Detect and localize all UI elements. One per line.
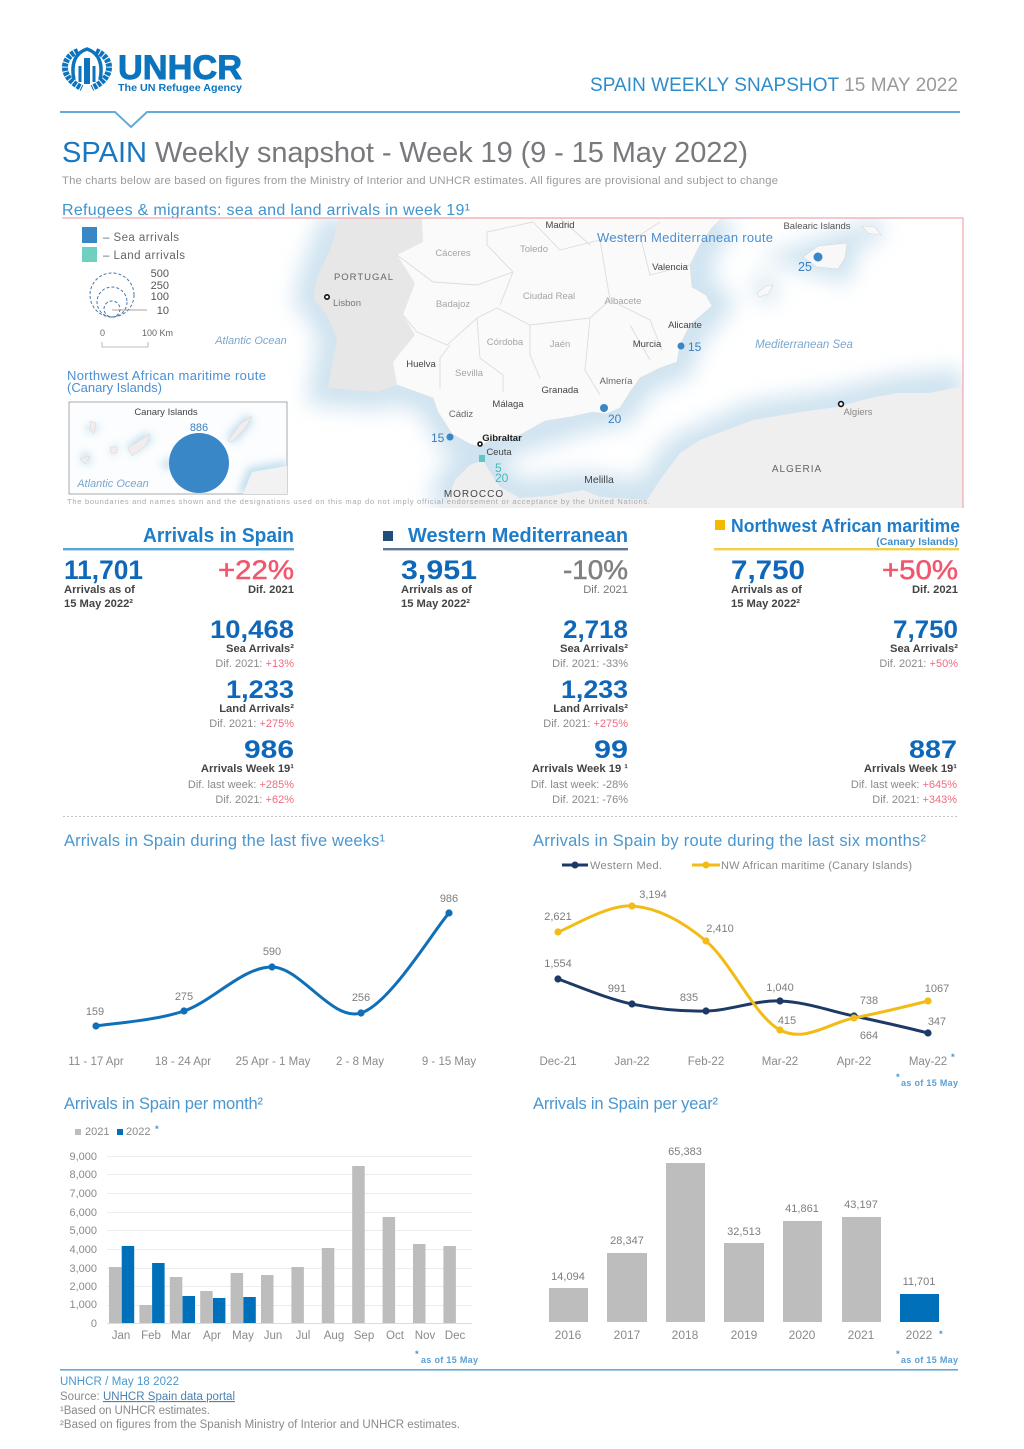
line chart: by route last six months: 1,554 bbox=[544, 958, 572, 970]
bar chart: arrivals per month: Feb bbox=[141, 1330, 161, 1342]
bar chart: arrivals per month: 0 bbox=[91, 1318, 97, 1330]
place names: Jaén bbox=[550, 339, 570, 350]
place names: Madrid bbox=[545, 220, 575, 231]
line chart: by route last six months: Apr-22 bbox=[837, 1056, 871, 1068]
line chart: last five weeks: 256 bbox=[352, 992, 370, 1004]
inset map: Canary Islands: Canary Islands bbox=[134, 407, 198, 418]
land: Portugal bbox=[313, 218, 423, 392]
bar chart: arrivals per month: 9,000 bbox=[69, 1151, 97, 1163]
panel: Western Mediterranean: Western Mediterranean bbox=[408, 525, 628, 547]
line chart: by route last six months: * bbox=[951, 1052, 955, 1063]
bar chart: arrivals per year: 65,383 bbox=[668, 1146, 702, 1158]
place names: Granada bbox=[542, 385, 579, 396]
map legend: 100 bbox=[151, 291, 169, 303]
legend bbox=[562, 860, 912, 872]
line chart: by route last six months: May-22 bbox=[909, 1056, 947, 1068]
arrival markers: 15 bbox=[688, 340, 702, 354]
bar chart: arrivals per month: Mar bbox=[171, 1330, 191, 1342]
bar chart: arrivals per month: May bbox=[232, 1330, 254, 1342]
line chart: by route last six months: 1,040 bbox=[766, 982, 794, 994]
arrival markers: 20 bbox=[608, 412, 622, 426]
wordmark: UNHCR bbox=[118, 49, 242, 87]
line chart: by route last six months: 3,194 bbox=[639, 889, 667, 901]
line chart: last five weeks: 25 Apr - 1 May bbox=[236, 1056, 311, 1068]
panel: Western Mediterranean: Dif. 2021: +275% bbox=[543, 718, 628, 730]
panel: Western Mediterranean bbox=[383, 525, 628, 806]
route label: Northwest African bbox=[67, 368, 266, 395]
arrival markers: 25 bbox=[798, 260, 812, 274]
bar chart: arrivals per year: 14,094 bbox=[551, 1271, 585, 1283]
bar chart: arrivals per year bbox=[533, 1095, 958, 1365]
legend: * bbox=[155, 1124, 159, 1135]
bar chart: arrivals per year: 41,861 bbox=[785, 1203, 819, 1215]
footer: Source: UNHCR Spain data portal bbox=[60, 1391, 235, 1403]
line chart: last five weeks: 986 bbox=[440, 893, 458, 905]
place names: PORTUGAL bbox=[334, 272, 394, 283]
bar chart: arrivals per month: 8,000 bbox=[69, 1169, 97, 1181]
panel: Western Mediterranean: 99 bbox=[594, 736, 628, 764]
map legend: 0 bbox=[100, 328, 105, 338]
line chart: by route last six months bbox=[533, 832, 958, 1088]
panel: Northwest African maritime: Northwest African maritime bbox=[731, 515, 960, 536]
footer: ¹Based on UNHCR estimates. bbox=[60, 1405, 210, 1417]
place names: Alicante bbox=[668, 320, 702, 331]
place names: Ciudad Real bbox=[523, 291, 575, 302]
bar chart: arrivals per year: 2022 bbox=[906, 1328, 933, 1342]
legend: 2021 bbox=[85, 1126, 109, 1138]
map legend: 100 Km bbox=[142, 328, 173, 338]
panel: Northwest African maritime: Dif. 2021: +343% bbox=[872, 794, 957, 806]
ocean and sea labels: Mediterranean Sea bbox=[755, 339, 853, 351]
panel: Arrivals in Spain: Arrivals in Spain bbox=[143, 525, 294, 547]
line chart: last five weeks: Arrivals in Spain during the last five weeks¹ bbox=[64, 832, 386, 850]
bar chart: arrivals per year: as of 15 May bbox=[901, 1355, 958, 1365]
bar chart: arrivals per month: Oct bbox=[386, 1330, 405, 1342]
line chart: by route last six months: Jan-22 bbox=[614, 1056, 650, 1068]
panel: Northwest African maritime bbox=[714, 515, 960, 806]
bar chart: arrivals per year: 2016 bbox=[555, 1328, 582, 1342]
line chart: by route last six months: * bbox=[896, 1072, 900, 1083]
legend bbox=[75, 1124, 159, 1138]
panel: Northwest African maritime: Dif. 2021: +50% bbox=[879, 658, 958, 670]
line chart: last five weeks: 159 bbox=[86, 1006, 104, 1018]
map legend bbox=[82, 227, 185, 347]
map legend: 250 bbox=[151, 280, 169, 292]
place names: Ceuta bbox=[486, 447, 512, 458]
panel: Western Mediterranean: Arrivals Week 19 ¹ bbox=[532, 763, 628, 775]
panel: Arrivals in Spain: Dif. 2021 bbox=[248, 584, 294, 596]
line chart: by route last six months: Dec-21 bbox=[539, 1056, 577, 1068]
panel: Western Mediterranean: Dif. 2021 bbox=[583, 584, 628, 596]
line chart: last five weeks: 275 bbox=[175, 991, 193, 1003]
title: SPAIN bbox=[62, 137, 147, 169]
bar chart: arrivals per month: 2,000 bbox=[69, 1281, 97, 1293]
place names: Sevilla bbox=[455, 368, 484, 379]
panel: Arrivals in Spain: 15 May 2022² bbox=[64, 598, 133, 610]
bar chart: arrivals per month: Dec bbox=[445, 1330, 465, 1342]
panel: Arrivals in Spain: Land Arrivals² bbox=[219, 703, 294, 715]
panel: Northwest African maritime: Arrivals as of bbox=[731, 584, 802, 596]
line chart: by route last six months: Arrivals in Spain by route during the last six months² bbox=[533, 832, 926, 850]
panel: Arrivals in Spain: 10,468 bbox=[210, 616, 294, 644]
footer: ²Based on figures from the Spanish Ministry of Interior and UNHCR estimates. bbox=[60, 1419, 460, 1431]
place names: Almería bbox=[600, 376, 633, 387]
route label: Northwest African: (Canary Islands) bbox=[67, 380, 162, 395]
route label: Western Mediterranean: Western Mediterranean route bbox=[597, 230, 773, 245]
line chart: last five weeks: 9 - 15 May bbox=[422, 1056, 476, 1068]
panel: Arrivals in Spain: Dif. 2021: +62% bbox=[215, 794, 294, 806]
ocean and sea labels bbox=[214, 335, 853, 351]
panel: Northwest African maritime: Dif. last week: +645% bbox=[851, 779, 957, 791]
line chart: by route last six months: as of 15 May bbox=[901, 1078, 958, 1088]
bar chart: arrivals per year: 2021 bbox=[848, 1328, 875, 1342]
map legend: 500 bbox=[151, 268, 169, 280]
bar chart: arrivals per month: 3,000 bbox=[69, 1263, 97, 1275]
legend: 2022 bbox=[126, 1126, 150, 1138]
panel: Northwest African maritime: 887 bbox=[909, 736, 957, 764]
bar chart: arrivals per month: Jan bbox=[112, 1330, 130, 1342]
panel: Western Mediterranean: 15 May 2022² bbox=[401, 598, 470, 610]
province borders bbox=[397, 218, 690, 395]
panel: Arrivals in Spain: Dif. last week: +285% bbox=[188, 779, 294, 791]
panel: Arrivals in Spain: 11,701 bbox=[64, 555, 143, 585]
bar chart: arrivals per month: Sep bbox=[354, 1330, 374, 1342]
panel: Northwest African maritime: 7,750 bbox=[893, 616, 958, 644]
panel: map bbox=[62, 218, 963, 508]
bar chart: arrivals per month bbox=[64, 1095, 478, 1365]
bar chart: arrivals per year: 2019 bbox=[731, 1328, 758, 1342]
bar chart: arrivals per year: * bbox=[896, 1349, 900, 1360]
panel: Arrivals in Spain: 1,233 bbox=[226, 676, 294, 704]
line chart: last five weeks: 2 - 8 May bbox=[336, 1056, 384, 1068]
panel: Arrivals in Spain bbox=[63, 525, 294, 806]
panel: Arrivals in Spain: Dif. 2021: +275% bbox=[209, 718, 294, 730]
land: Spain bbox=[313, 218, 722, 447]
bar chart: arrivals per year: 43,197 bbox=[844, 1199, 878, 1211]
line chart: by route last six months: 664 bbox=[860, 1030, 878, 1042]
place names: Murcia bbox=[633, 339, 662, 350]
inset map: Canary Islands bbox=[69, 402, 287, 494]
line chart: last five weeks: 11 - 17 Apr bbox=[68, 1056, 124, 1068]
line chart: last five weeks: 18 - 24 Apr bbox=[155, 1056, 211, 1068]
place names: Lisbon bbox=[333, 298, 361, 309]
inset map: Canary Islands: Atlantic Ocean bbox=[76, 478, 149, 490]
place names: Melilla bbox=[584, 474, 614, 486]
bar chart: arrivals per year: Arrivals in Spain per year² bbox=[533, 1095, 718, 1113]
panel: Western Mediterranean: Dif. last week: -28% bbox=[531, 779, 628, 791]
bar chart: arrivals per year: 2017 bbox=[614, 1328, 641, 1342]
bar chart: arrivals per month: Arrivals in Spain per month² bbox=[64, 1095, 264, 1113]
map legend: – Sea arrivals bbox=[103, 232, 179, 244]
place names: Cáceres bbox=[435, 248, 471, 259]
panel: Arrivals in Spain: Arrivals Week 19¹ bbox=[201, 763, 294, 775]
title: Weekly snapshot - Week 19 (9 - 15 May 2022) bbox=[155, 137, 748, 169]
arrival markers: 20 bbox=[495, 471, 509, 485]
place names: Huelva bbox=[406, 359, 436, 370]
header label: SPAIN WEEKLY SNAPSHOT 15 MAY 2022 bbox=[590, 75, 958, 96]
panel: Northwest African maritime: 7,750 bbox=[731, 555, 805, 585]
place names: Valencia bbox=[652, 262, 689, 273]
bar chart: arrivals per year: 32,513 bbox=[727, 1226, 761, 1238]
UNHCR logo bbox=[65, 49, 242, 94]
panel: Western Mediterranean: Sea Arrivals² bbox=[560, 643, 628, 655]
bar chart: arrivals per month: Aug bbox=[324, 1330, 344, 1342]
panel: Northwest African maritime: 15 May 2022² bbox=[731, 598, 800, 610]
route label: Northwest African: Northwest African maritime route bbox=[67, 368, 266, 383]
bar chart: arrivals per month: 1,000 bbox=[69, 1299, 97, 1311]
bar chart: arrivals per month: 5,000 bbox=[69, 1225, 97, 1237]
bar chart: arrivals per month: 4,000 bbox=[69, 1244, 97, 1256]
arrival markers: 5 bbox=[495, 461, 502, 475]
panel: Western Mediterranean: 2,718 bbox=[563, 616, 628, 644]
place names: Gibraltar bbox=[482, 433, 522, 444]
map legend: – Land arrivals bbox=[103, 250, 185, 262]
panel: Western Mediterranean: 1,233 bbox=[561, 676, 628, 704]
panel: Northwest African maritime: Arrivals Week 19¹ bbox=[864, 763, 957, 775]
place names: MOROCCO bbox=[444, 489, 504, 500]
panel: Arrivals in Spain: Dif. 2021: +13% bbox=[215, 658, 294, 670]
panel: Northwest African maritime: +50% bbox=[882, 555, 958, 585]
inset map: Canary Islands: 886 bbox=[190, 422, 208, 434]
line chart: by route last six months: 415 bbox=[778, 1015, 796, 1027]
panel: Western Mediterranean: Land Arrivals² bbox=[553, 703, 628, 715]
panel: Arrivals in Spain: Sea Arrivals² bbox=[226, 643, 294, 655]
bar chart: arrivals per year: 11,701 bbox=[903, 1276, 935, 1288]
place names: Badajoz bbox=[436, 299, 470, 310]
icon: wreath and sheltered figures bbox=[65, 49, 109, 88]
line chart: by route last six months: 2,410 bbox=[706, 923, 734, 935]
line chart: by route last six months: 991 bbox=[608, 983, 626, 995]
bar chart: arrivals per year: 28,347 bbox=[610, 1235, 644, 1247]
tagline: The UN Refugee Agency bbox=[118, 82, 242, 94]
panel: Arrivals in Spain: Arrivals as of bbox=[64, 584, 135, 596]
arrival markers: 15 bbox=[431, 431, 445, 445]
place names: Albacete bbox=[605, 296, 641, 307]
bar chart: arrivals per month: 6,000 bbox=[69, 1207, 97, 1219]
Balearic islands bbox=[757, 226, 881, 297]
line chart: by route last six months: 835 bbox=[680, 992, 698, 1004]
bar chart: arrivals per month: as of 15 May bbox=[421, 1355, 478, 1365]
place names bbox=[325, 220, 873, 500]
panel: Arrivals in Spain: +22% bbox=[218, 555, 294, 585]
panel: Arrivals in Spain: 986 bbox=[244, 736, 294, 764]
place names: Algiers bbox=[843, 407, 873, 418]
bar chart: arrivals per month: Jul bbox=[296, 1330, 310, 1342]
legend: NW African maritime (Canary Islands) bbox=[721, 860, 912, 872]
place names: ALGERIA bbox=[772, 464, 822, 475]
panel: Western Mediterranean: 3,951 bbox=[401, 555, 477, 585]
line chart: by route last six months: Feb-22 bbox=[688, 1056, 724, 1068]
map legend: 10 bbox=[157, 305, 169, 317]
place names: Balearic Islands bbox=[783, 221, 851, 232]
footer rule bbox=[60, 1369, 958, 1371]
bar chart: arrivals per month: 7,000 bbox=[69, 1188, 97, 1200]
line chart: by route last six months: 347 bbox=[928, 1016, 946, 1028]
legend: Western Med. bbox=[590, 860, 662, 872]
bar chart: arrivals per month: Nov bbox=[415, 1330, 435, 1342]
panel: Northwest African maritime: (Canary Islands) bbox=[876, 536, 958, 548]
panel: Western Mediterranean: Dif. 2021: -76% bbox=[552, 794, 628, 806]
line chart: by route last six months: 1067 bbox=[925, 983, 949, 995]
bar chart: arrivals per year: 2018 bbox=[672, 1328, 699, 1342]
line chart: by route last six months: Mar-22 bbox=[762, 1056, 798, 1068]
bar chart: arrivals per year: * bbox=[939, 1329, 943, 1340]
arrival markers bbox=[431, 252, 822, 485]
place names: Cádiz bbox=[449, 409, 473, 420]
bar chart: arrivals per month: * bbox=[415, 1349, 419, 1360]
bar chart: arrivals per year: 2020 bbox=[789, 1328, 816, 1342]
bubble: Canary arrivals bbox=[169, 433, 229, 493]
panel: Northwest African maritime: Sea Arrivals² bbox=[890, 643, 958, 655]
sea glow along coasts bbox=[313, 218, 963, 508]
panel: Western Mediterranean: Dif. 2021: -33% bbox=[552, 658, 628, 670]
place names: Córdoba bbox=[487, 337, 524, 348]
line chart: last five weeks: 590 bbox=[263, 946, 281, 958]
footer: UNHCR / May 18 2022 bbox=[60, 1376, 179, 1388]
land: North Africa bbox=[445, 386, 963, 508]
ocean and sea labels: Atlantic Ocean bbox=[214, 335, 287, 347]
place names: Málaga bbox=[492, 399, 524, 410]
panel: Western Mediterranean: Arrivals as of bbox=[401, 584, 472, 596]
footer bbox=[60, 1376, 460, 1431]
line chart: by route last six months: 738 bbox=[860, 995, 878, 1007]
subtitle: The charts below are based on figures from the Ministry of Interior and UNHCR estimates. All figures are provisional and subject to change bbox=[62, 175, 778, 187]
bar chart: arrivals per month: Jun bbox=[264, 1330, 282, 1342]
header rule with notch bbox=[60, 112, 960, 127]
map heading: Refugees & migrants: sea and land arrivals in week 19¹ bbox=[62, 202, 470, 219]
panel: Northwest African maritime: Dif. 2021 bbox=[912, 584, 958, 596]
line chart: last five weeks bbox=[64, 832, 476, 1068]
map frame bbox=[62, 218, 963, 508]
map credits: The boundaries and names shown and the designations used on this map do not imply official endorsement or acceptance by the United Nations. bbox=[67, 497, 650, 506]
place names: Toledo bbox=[520, 244, 548, 255]
bar chart: arrivals per month: Apr bbox=[203, 1330, 221, 1342]
panel: Western Mediterranean: -10% bbox=[563, 555, 628, 585]
line chart: by route last six months: 2,621 bbox=[544, 911, 572, 923]
